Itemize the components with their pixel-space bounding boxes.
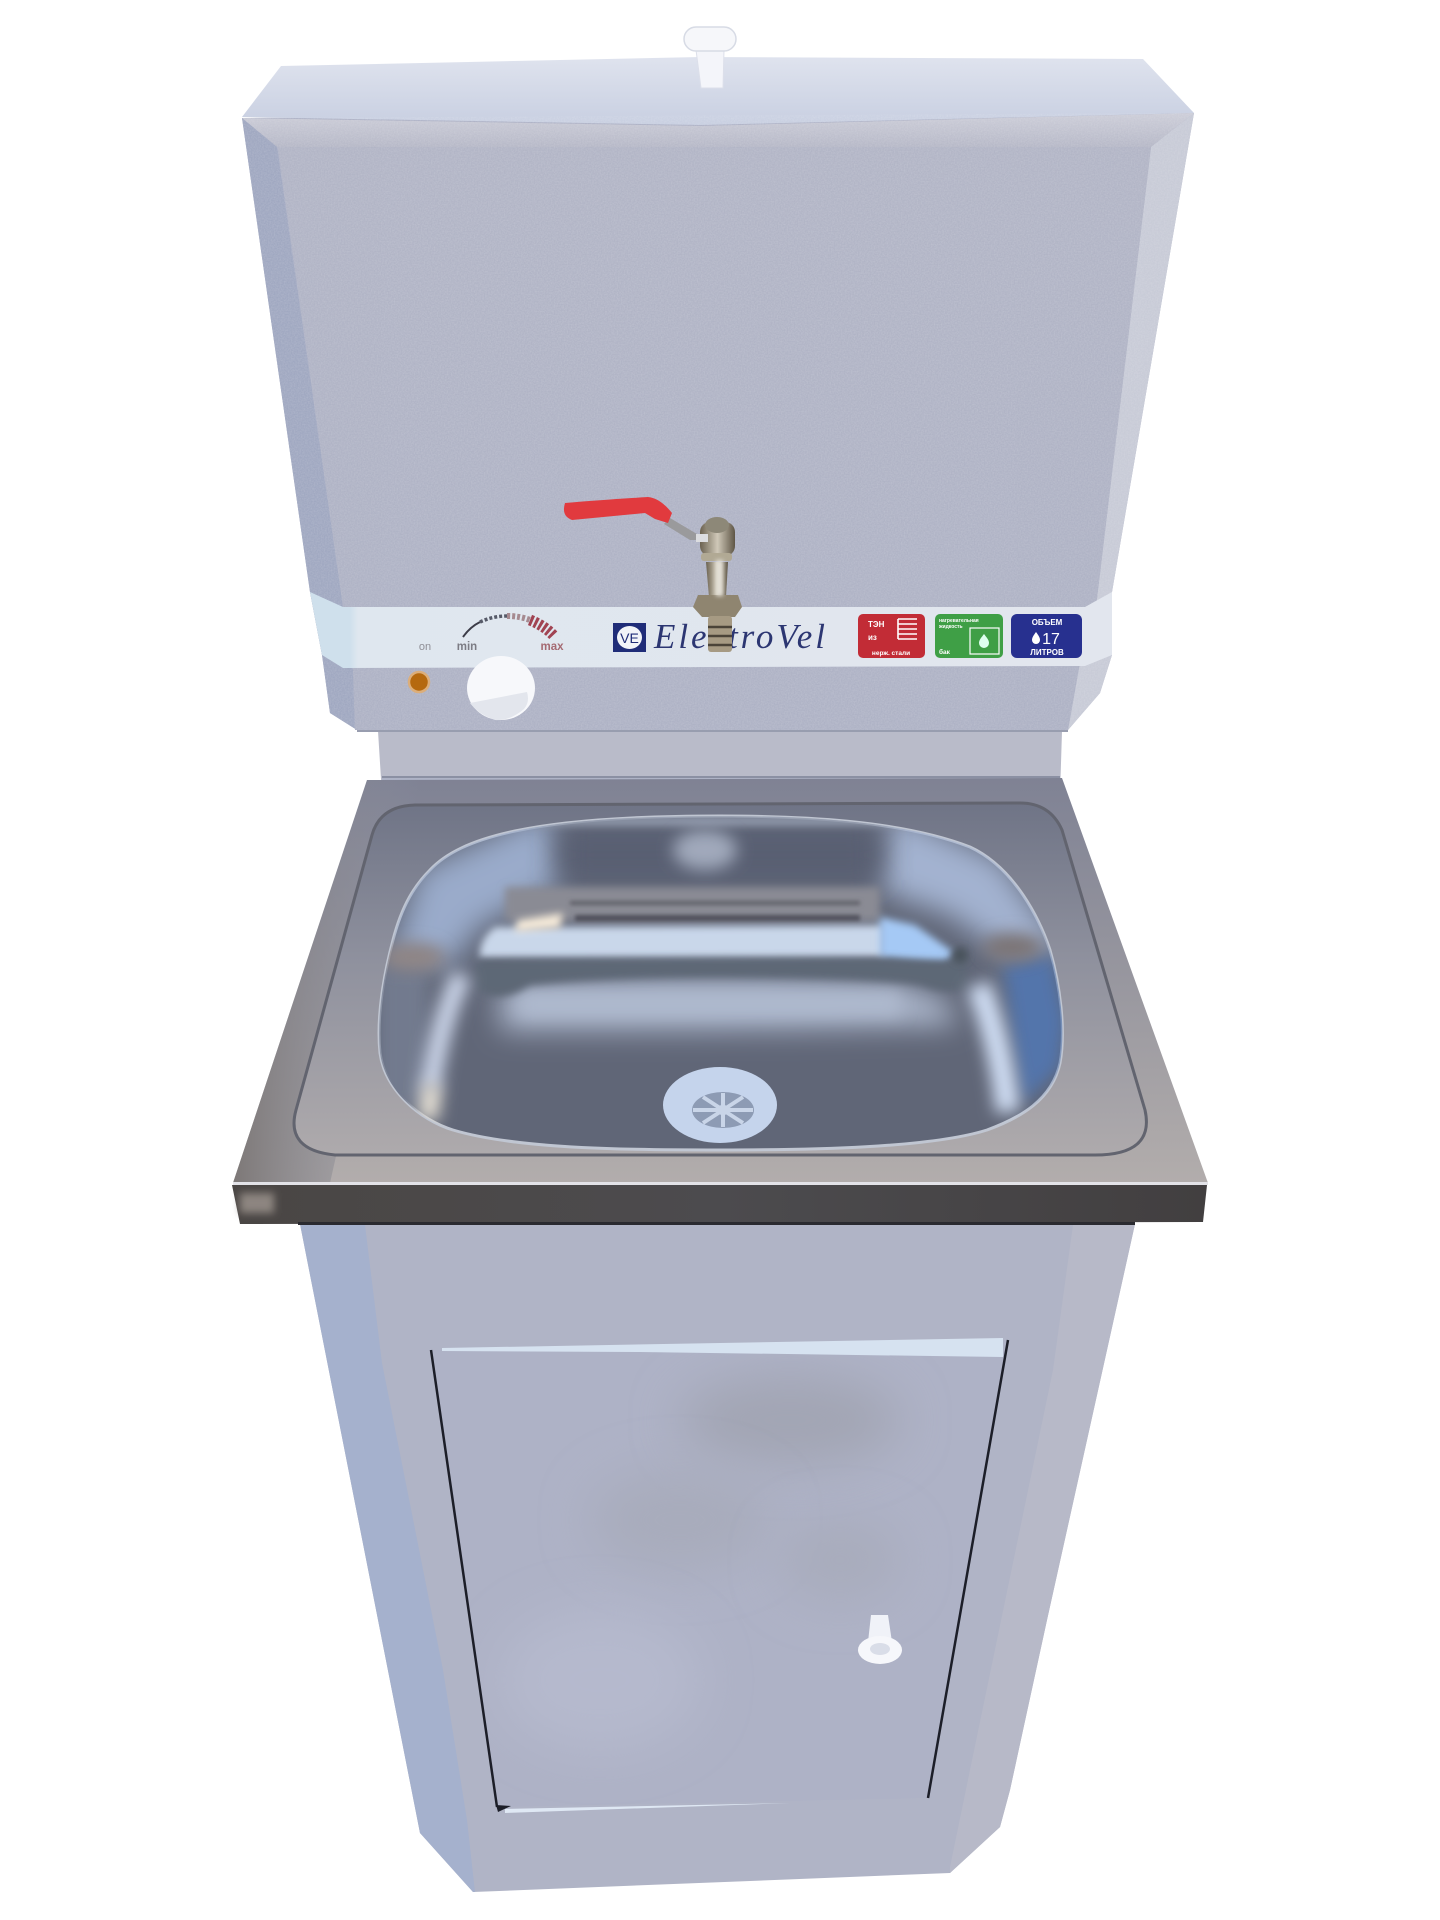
top knob	[684, 27, 736, 88]
lid top	[242, 57, 1194, 125]
tank left side	[242, 118, 357, 730]
sink	[232, 778, 1208, 1224]
on label: on	[419, 641, 431, 653]
highlight band	[480, 925, 885, 958]
right lower wall	[1003, 955, 1066, 1100]
badge: volume	[1011, 614, 1082, 658]
badge: volume: ЛИТРОВ	[1030, 648, 1064, 657]
neck	[378, 731, 1062, 795]
faucet	[564, 497, 742, 652]
cabinet	[298, 1222, 1135, 1892]
badge: tank: бак	[939, 648, 951, 656]
cabinet right facet	[950, 1224, 1135, 1873]
surface texture	[242, 118, 1150, 730]
brand name: ElectroVel	[653, 617, 825, 656]
stripes	[505, 887, 880, 921]
cabinet left facet	[300, 1224, 475, 1892]
tank silhouette	[242, 113, 1194, 730]
tank body	[240, 55, 1200, 795]
bowl reflections	[378, 810, 1066, 1120]
door knob	[858, 1615, 902, 1664]
badge: volume: ОБЪЕМ	[1032, 618, 1063, 627]
badge: heating element: ТЭН	[868, 620, 885, 629]
faucet lever	[664, 518, 699, 540]
dark bar	[474, 952, 968, 996]
badge: tank: нагревательная	[939, 618, 979, 624]
upper walls	[391, 826, 570, 979]
badge: tank	[935, 614, 1003, 658]
cabinet body	[300, 1224, 1135, 1892]
control knob	[409, 656, 535, 720]
max label: max	[540, 641, 564, 653]
lid front	[242, 113, 1194, 147]
sink bowl	[379, 816, 1062, 1150]
badge: heating element: нерж. стали	[872, 650, 910, 657]
badge: volume: 17	[1042, 631, 1060, 648]
min label: min	[457, 641, 477, 653]
tank front panel	[278, 147, 1151, 730]
badge: heating element	[858, 614, 925, 658]
brand logo	[613, 623, 646, 652]
illustration: washbasin with water heater	[232, 26, 1208, 1892]
power indicator	[409, 672, 429, 692]
floor light zone	[500, 978, 955, 1030]
control band	[310, 592, 1112, 668]
faucet handle	[564, 497, 672, 523]
sink trough	[294, 803, 1146, 1155]
brand logo: VE	[620, 630, 639, 646]
tank right side	[1068, 113, 1194, 730]
sink front edge	[232, 1185, 1207, 1224]
sink rim	[233, 778, 1208, 1183]
sink drain	[663, 1067, 777, 1143]
cabinet door	[431, 1338, 1008, 1813]
left lower wall	[378, 965, 428, 1110]
cabinet shadow	[298, 1222, 1135, 1225]
faucet body	[700, 522, 735, 556]
temperature scale	[463, 616, 554, 637]
badge: heating element: из	[868, 633, 877, 642]
badge: tank: жидкость	[938, 624, 963, 630]
